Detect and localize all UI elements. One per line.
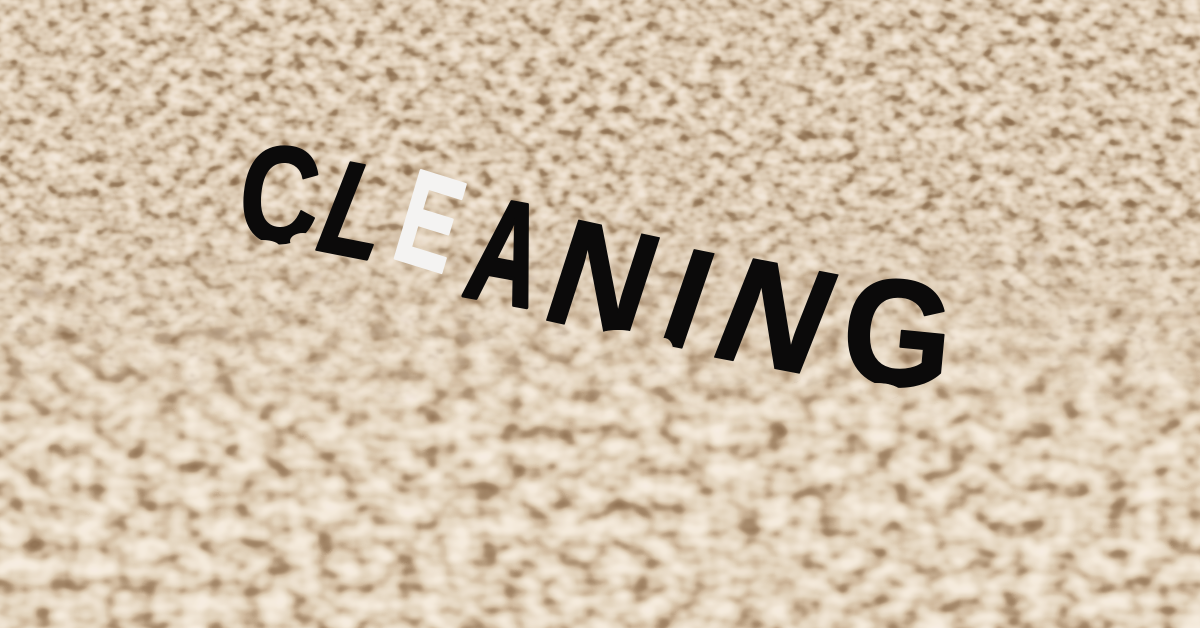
carpet tufts over letter bases: [261, 233, 948, 399]
letter C: C: [232, 117, 327, 274]
letter G: G: [836, 243, 960, 422]
letter N: N: [527, 187, 678, 372]
letter E: E: [381, 141, 479, 301]
letter N: N: [693, 226, 860, 405]
word: CLEANING: [232, 117, 960, 422]
letter L: L: [299, 135, 414, 287]
letter I: I: [643, 219, 733, 380]
letter A: A: [453, 167, 562, 339]
